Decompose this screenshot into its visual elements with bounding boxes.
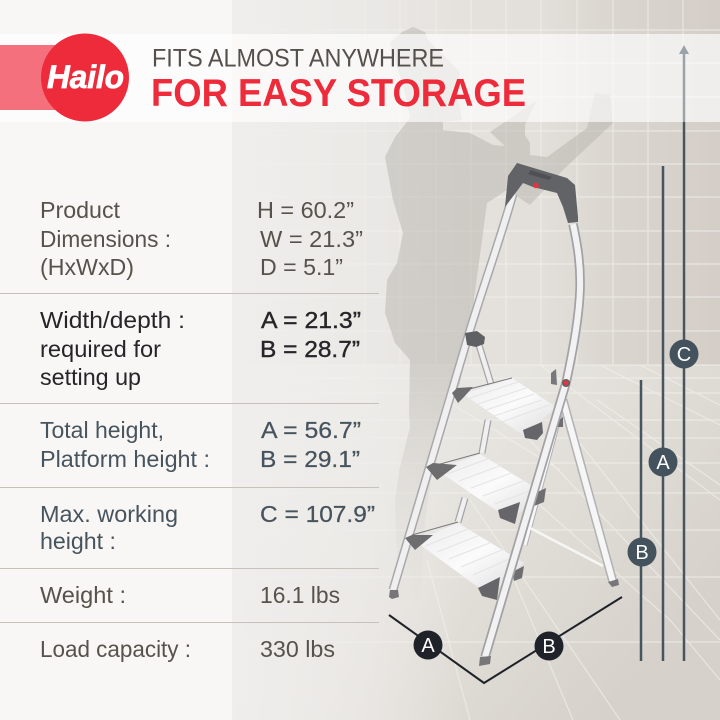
row: width and depth: B = 28.7”: [260, 336, 360, 362]
dimension line A: A: [656, 452, 670, 474]
row: product dimensions: W = 21.3”: [260, 226, 363, 252]
row: total and platform height: B = 29.1”: [260, 446, 360, 472]
dimension line B: [628, 380, 656, 661]
top handle: [505, 163, 578, 223]
title: [151, 44, 526, 115]
row dividers: [0, 294, 379, 622]
row: weight: 16.1 lbs: [260, 582, 340, 608]
row: total and platform height: Platform height :: [40, 446, 210, 472]
left rail: [393, 194, 513, 590]
row: product dimensions: (HxWxD): [40, 254, 134, 280]
row: load capacity: Load capacity :: [40, 636, 191, 662]
floor footprint bracket with A and B: B: [542, 636, 556, 658]
left text panel: [0, 0, 232, 720]
rear legs and struts: [458, 345, 613, 582]
row: max working height: height :: [40, 528, 116, 554]
row: width and depth: required for: [40, 336, 161, 362]
row: width and depth: A = 21.3”: [261, 307, 361, 333]
logo: pink tab and red circle: Hailo: [47, 59, 124, 95]
title: FITS ALMOST ANYWHERE: [152, 44, 444, 72]
title: FOR EASY STORAGE: [151, 72, 526, 115]
row: total and platform height: Total height,: [40, 417, 164, 443]
row: product dimensions: D = 5.1”: [260, 254, 343, 280]
dimension line B: B: [635, 542, 649, 564]
ladder illustration: [389, 163, 619, 666]
row: width and depth: Width/depth :: [40, 307, 185, 333]
row: max working height: Max. working: [40, 501, 178, 527]
front curved rail: [485, 224, 580, 657]
silhouette of person: [385, 27, 613, 600]
handle grip slot: [528, 170, 552, 180]
row: total and platform height: [40, 417, 361, 472]
row: product dimensions: Dimensions :: [40, 226, 171, 252]
row: width and depth: [40, 307, 361, 390]
tread 1: [452, 378, 563, 440]
red button on handle: [533, 183, 539, 188]
row: weight: [40, 582, 340, 608]
background: wall and floor scene: [232, 0, 720, 720]
header band: [0, 34, 720, 122]
row: load capacity: [40, 636, 335, 662]
tread 3: [405, 522, 524, 600]
dimension line C with arrow: [670, 45, 698, 661]
floor footprint bracket with A and B: A: [421, 635, 435, 657]
dimension line C with arrow: C: [677, 344, 691, 366]
row: product dimensions: [40, 197, 363, 280]
row: weight: Weight :: [40, 582, 126, 608]
row: product dimensions: Product: [40, 197, 121, 223]
hinge brackets: [465, 331, 570, 387]
tread 2: [426, 453, 546, 524]
dimension line A: [648, 166, 678, 661]
floor footprint bracket with A and B: [389, 597, 622, 683]
logo: pink tab and red circle: [0, 34, 129, 122]
row: load capacity: 330 lbs: [260, 636, 335, 662]
row: total and platform height: A = 56.7”: [261, 417, 361, 443]
row: width and depth: setting up: [40, 364, 141, 390]
ladder feet: [389, 579, 619, 666]
row: product dimensions: H = 60.2”: [257, 197, 354, 223]
row: max working height: C = 107.9”: [260, 501, 375, 527]
row: max working height: [40, 501, 375, 554]
